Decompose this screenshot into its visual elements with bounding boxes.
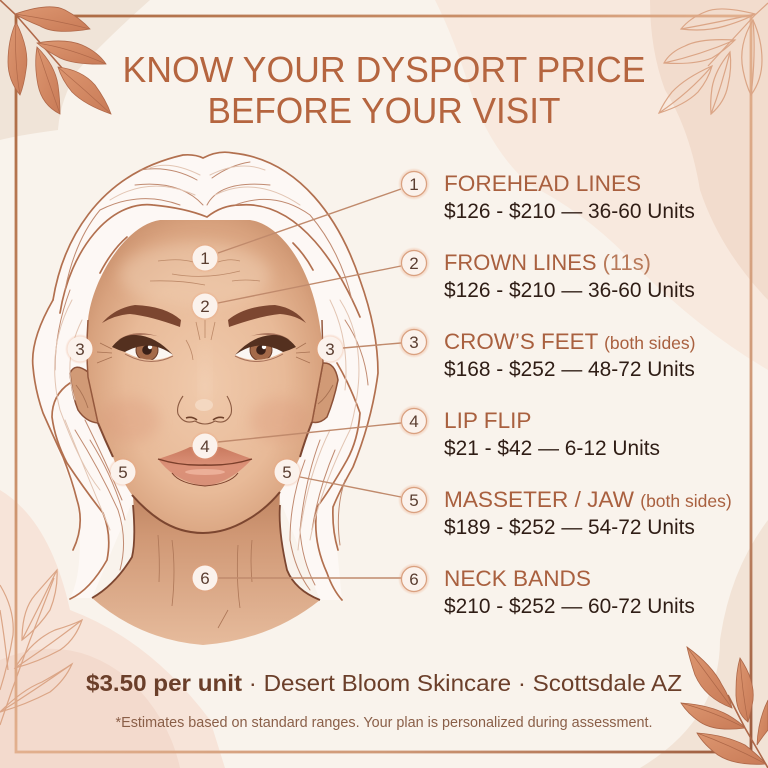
face markers: 3	[325, 340, 335, 359]
cheeks	[100, 398, 310, 442]
face markers: 3	[75, 340, 85, 359]
connector lines	[218, 189, 401, 578]
price item 3: crow's feet	[398, 326, 696, 381]
nose highlight	[200, 335, 210, 400]
price item 6: neck bands: 6	[409, 570, 419, 589]
face markers: 2	[200, 297, 210, 316]
crow's feet lines	[97, 343, 310, 363]
head	[87, 220, 323, 533]
face illustration	[33, 152, 378, 645]
corner leaves: top right	[659, 3, 768, 114]
title: BEFORE YOUR VISIT	[208, 90, 561, 131]
price item 4: lip flip: $21 - $42 — 6-12 Units	[444, 437, 660, 460]
forehead shade	[120, 243, 270, 307]
title: KNOW YOUR DYSPORT PRICE	[122, 49, 646, 90]
price item 5: masseter / jaw: 5	[409, 491, 419, 510]
hair strands: main outlines	[33, 152, 378, 600]
price item 6: neck bands	[398, 563, 695, 618]
hair fill	[33, 152, 378, 600]
price item 3: crow's feet: $168 - $252 — 48-72 Units	[444, 358, 695, 381]
corner leaves: bottom left	[0, 570, 82, 725]
footer summary: $3.50 per unit · Desert Bloom Skincare · Scottsdale AZ	[86, 670, 682, 696]
ears	[70, 363, 338, 423]
price item 5: masseter / jaw: MASSETER / JAW (both sides)	[444, 487, 732, 512]
neck	[92, 490, 320, 645]
price item 4: lip flip: 4	[409, 412, 419, 431]
face markers: 1	[200, 249, 210, 268]
nose	[178, 396, 232, 424]
eyes	[112, 333, 296, 362]
price item 1: forehead lines: $126 - $210 — 36-60 Units	[444, 200, 695, 223]
price item 1: forehead lines	[398, 168, 695, 223]
lips	[158, 447, 252, 486]
price item 6: neck bands: NECK BANDS	[444, 566, 591, 591]
face markers: 4	[200, 437, 210, 456]
price item 2: frown lines: $126 - $210 — 36-60 Units	[444, 279, 695, 302]
neck lines	[158, 535, 252, 628]
price item 2: frown lines: FROWN LINES (11s)	[444, 250, 651, 275]
price item 3: crow's feet: CROW’S FEET (both sides)	[444, 329, 696, 354]
face markers	[65, 243, 345, 593]
price item 3: crow's feet: 3	[409, 333, 419, 352]
title	[122, 49, 646, 131]
price item 4: lip flip	[398, 405, 660, 460]
price item 5: masseter / jaw: $189 - $252 — 54-72 Units	[444, 516, 695, 539]
price item 6: neck bands: $210 - $252 — 60-72 Units	[444, 595, 695, 618]
corner leaves: top left	[0, 0, 111, 114]
face markers: 5	[282, 463, 292, 482]
face markers: 6	[200, 569, 210, 588]
corner leaves: bottom right	[681, 647, 768, 768]
face markers: 5	[118, 463, 128, 482]
eyebrows	[102, 305, 306, 327]
price item 2: frown lines: 2	[409, 254, 419, 273]
footnote: *Estimates based on standard ranges. Your plan is personalized during assessment.	[116, 715, 652, 731]
price item 5: masseter / jaw	[398, 484, 732, 539]
price item 4: lip flip: LIP FLIP	[444, 408, 532, 433]
price item 2: frown lines	[398, 247, 695, 302]
forehead lines	[150, 260, 260, 360]
hair strands: fine lines	[55, 162, 368, 590]
price item 1: forehead lines: FOREHEAD LINES	[444, 171, 641, 196]
price item 1: forehead lines: 1	[409, 175, 419, 194]
